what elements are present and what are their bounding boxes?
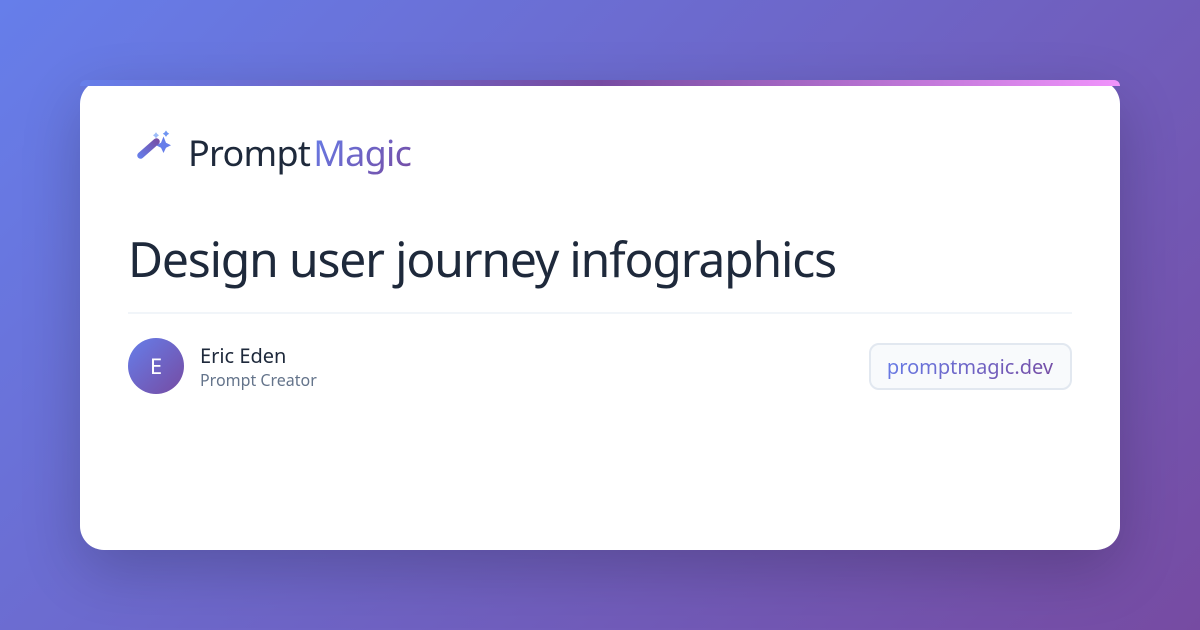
website badge [869, 343, 1072, 390]
website badge: promptmagic.dev [887, 353, 1053, 380]
title: Design user journey infographics [128, 227, 836, 292]
icon: magic wand [137, 130, 171, 159]
author role: Prompt Creator [200, 369, 317, 391]
author avatar [128, 338, 184, 394]
card panel [80, 80, 1120, 550]
divider [128, 312, 1072, 314]
author name: Eric Eden [200, 342, 286, 369]
logo text: PromptMagic [188, 128, 411, 177]
author avatar: E [150, 351, 162, 381]
top gradient bar [80, 80, 1120, 86]
